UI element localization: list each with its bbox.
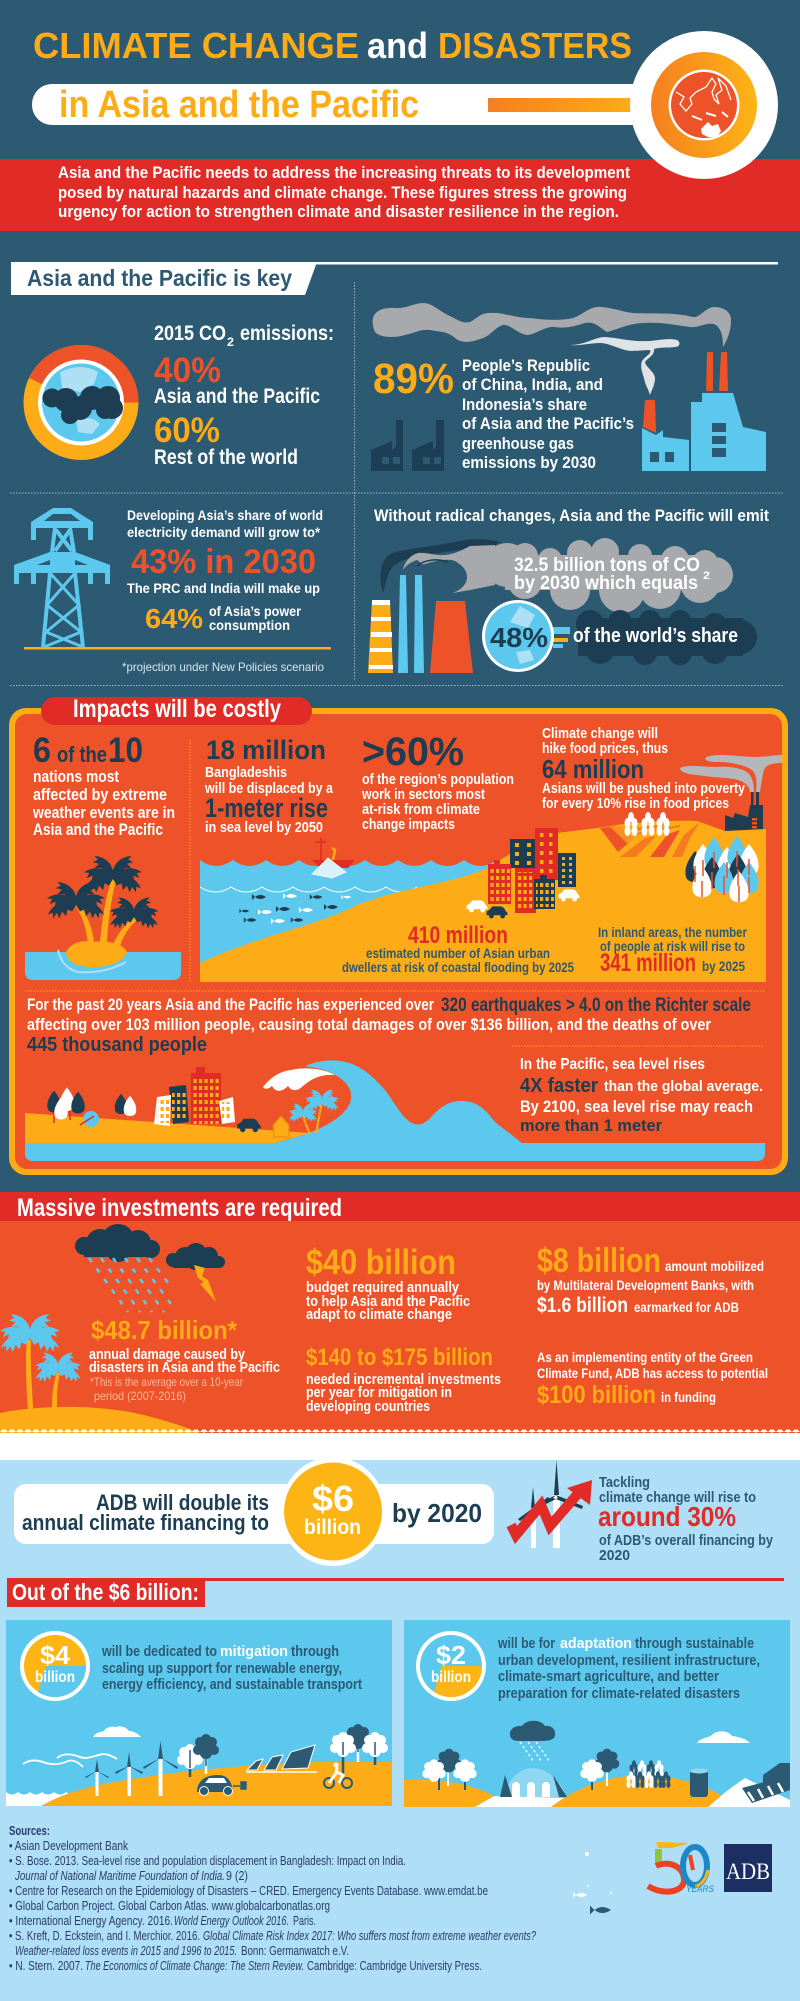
- circle: 4 billion: billion: [35, 1669, 75, 1686]
- stat: 64 million: Climate change will: [542, 725, 658, 742]
- stat: 341 million: In inland areas, the number: [598, 924, 747, 940]
- financing share text: around 30%: [598, 1501, 736, 1532]
- title line one: and: [367, 25, 428, 66]
- wheat: [624, 812, 670, 836]
- stat: 100 billion: $100 billion: [537, 1381, 656, 1409]
- sea and land scene: [200, 812, 766, 982]
- sources list: Weather-related loss events in 2015 and 1996 to 2015.: [15, 1944, 237, 1958]
- stat: 341 million: [598, 924, 747, 977]
- heading: without radical changes: Without radical changes, Asia and the Pacific will emit: [374, 507, 769, 525]
- adaptation scene: [404, 1721, 790, 1807]
- sources list: • Asian Development Bank: [9, 1839, 129, 1853]
- white cloud: [697, 1731, 750, 1743]
- sources list: [9, 1824, 536, 1973]
- stat: 48.7 billion: [89, 1315, 280, 1403]
- demand text: 43% in 2030: [131, 543, 316, 581]
- share text: Indonesia’s share: [462, 396, 587, 414]
- panel: mitigation: [6, 1620, 392, 1806]
- financing text: ADB will double its: [96, 1490, 269, 1515]
- red intro band: Asia and the Pacific needs to address the increasing threats to its development: [58, 163, 630, 182]
- stat: 48.7 billion: period (2007-2016): [94, 1389, 186, 1403]
- trees: [685, 836, 759, 902]
- adaptation text: through sustainable: [635, 1635, 754, 1652]
- stat: 18 million: [204, 735, 334, 836]
- stat: 8 billion: by Multilateral Development Banks, with: [537, 1277, 754, 1293]
- circle: 4 billion: $4: [40, 1640, 71, 1670]
- emission text: by 2030 which equals: [514, 573, 698, 594]
- ADB box: ADB: [726, 1859, 770, 1884]
- stat: 6 of the 10: affected by extreme: [33, 785, 167, 804]
- sources list: Journal of National Maritime Foundation of India.: [14, 1869, 225, 1883]
- heading: Out of the 6 billion: [7, 1578, 784, 1607]
- stat: 64 million: Asians will be pushed into poverty: [542, 780, 746, 797]
- palms: [288, 1088, 340, 1134]
- stat: more than 60 percent: work in sectors most: [361, 786, 485, 803]
- mitigation text: mitigation: [220, 1643, 288, 1660]
- ground line: [24, 647, 331, 650]
- stat: 48.7 billion: disasters in Asia and the Pacific: [89, 1359, 280, 1376]
- factory and smoke: [680, 755, 782, 831]
- stat: 6 of the 10: of the: [57, 742, 107, 767]
- share text: emissions by 2030: [462, 454, 596, 472]
- stat: more than 60 percent: >60%: [362, 730, 464, 774]
- sources list: Bonn: Germanwatch e.V.: [241, 1944, 349, 1958]
- financing share text: 2020: [599, 1547, 630, 1564]
- page background: [0, 0, 800, 1460]
- damaged buildings: [154, 1067, 235, 1126]
- foam: [263, 1068, 335, 1091]
- tsunami scene: [25, 1060, 765, 1161]
- stat: 64 million: hike food prices, thus: [542, 740, 668, 757]
- stat: 40 percent: Asia and the Pacific: [154, 385, 320, 408]
- water tank: [690, 1768, 708, 1797]
- icon: storm cloud and lightning: [166, 1243, 225, 1302]
- water and hill: [6, 1792, 78, 1806]
- stat: 89 percent: 89%: [373, 355, 454, 403]
- adaptation text: urban development, resilient infrastructure,: [498, 1652, 760, 1669]
- title pill with subtitle: in Asia and the Pacific: [59, 84, 419, 126]
- panel: Massive investments are required: [0, 1192, 800, 1433]
- stat: 410 million: 410 million: [408, 922, 508, 949]
- sea level text: more than 1 meter: [520, 1116, 662, 1135]
- car and hut: [237, 1116, 289, 1137]
- sources list: Global Climate Risk Index 2017: Who suffers most from extreme weather events?: [203, 1929, 536, 1943]
- stat: 100 billion: in funding: [661, 1389, 716, 1405]
- globe: 48 percent: 48%: [490, 622, 548, 653]
- earthquake text: 445 thousand people: [27, 1034, 207, 1056]
- stat: 140 to 175 billion: per year for mitigation in: [306, 1384, 452, 1401]
- circle: 6 billion: billion: [304, 1516, 361, 1539]
- earthquake text: [27, 995, 751, 1056]
- mitigation text: through: [291, 1643, 339, 1660]
- city buildings: [467, 828, 579, 918]
- adaptation text: preparation for climate-related disasters: [498, 1685, 740, 1702]
- panel: electricity demand: [14, 507, 331, 674]
- share text: [462, 357, 634, 472]
- wave: [25, 1060, 765, 1161]
- stat: 341 million: of people at risk will rise to: [600, 938, 745, 954]
- financing text: by 2020: [392, 1498, 482, 1528]
- adaptation text: adaptation: [560, 1635, 632, 1652]
- stat: 18 million: will be displaced by a: [204, 780, 334, 797]
- sources list: • Centre for Research on the Epidemiology of Disasters – CRED. Emergency Events Database. www.emdat.be: [9, 1884, 488, 1898]
- stat: more than 60 percent: change impacts: [362, 816, 455, 833]
- stat: 64 million: [542, 725, 746, 812]
- trees shaken: [47, 1088, 136, 1127]
- land: [200, 821, 766, 982]
- mitigation text: [101, 1643, 362, 1693]
- stat: 40 billion: budget required annually: [306, 1279, 460, 1296]
- stat: 64 million: 64 million: [542, 754, 644, 784]
- panel: 2015 CO2 emissions: [24, 322, 334, 469]
- section heading: Asia and the Pacific is key: [11, 262, 778, 295]
- white strip with zigzag edge: [0, 1430, 800, 1460]
- stat: 48.7 billion: $48.7 billion*: [91, 1315, 238, 1345]
- stat: 140 to 175 billion: [306, 1344, 501, 1415]
- mitigation text: energy efficiency, and sustainable transport: [102, 1676, 362, 1693]
- donut chart: emissions share: [24, 345, 138, 460]
- dark smoke: [380, 539, 500, 593]
- dark cloud label: [573, 610, 757, 665]
- stat: 18 million: Bangladeshis: [205, 764, 287, 781]
- emission text: 2: [703, 570, 710, 582]
- CO2 heading: 2015 CO: [154, 322, 226, 345]
- stat: 40 percent: [154, 351, 320, 408]
- circle: 6 billion: [280, 1457, 386, 1566]
- demand text: [122, 507, 324, 674]
- stat: 6 of the 10: Asia and the Pacific: [33, 820, 163, 839]
- cyclist: [324, 1762, 352, 1788]
- icon: globe in ring: [630, 31, 778, 179]
- wheat crops: [626, 1760, 671, 1788]
- raised house: [742, 1763, 790, 1803]
- light blue lower section: [0, 1460, 800, 2001]
- stat: more than 60 percent: at-risk from climate: [362, 801, 480, 818]
- stat: 60 percent: [154, 411, 298, 469]
- stat: 8 billion: amount mobilized: [665, 1258, 764, 1274]
- demand text: *projection under New Policies scenario: [122, 660, 324, 674]
- stat: 18 million: 18 million: [206, 735, 326, 765]
- stat: 18 million: 1-meter rise: [205, 793, 328, 823]
- stat: more than 60 percent: [361, 730, 514, 833]
- stat: 60 percent: 60%: [154, 411, 220, 450]
- stat: 410 million: estimated number of Asian urban: [366, 945, 550, 961]
- stat: 40 billion: [306, 1243, 470, 1323]
- demand text: electricity demand will grow to*: [127, 524, 320, 540]
- white pill: [14, 1484, 494, 1544]
- title line one: [33, 25, 632, 66]
- financing share text: climate change will rise to: [599, 1489, 756, 1506]
- circle: 2 billion: $2: [436, 1640, 466, 1670]
- heading pill: Impacts will be costly: [73, 695, 281, 723]
- icon: chimneys: [368, 575, 473, 673]
- sources list: Cambridge: Cambridge University Press.: [307, 1959, 482, 1973]
- stat: 100 billion: [537, 1349, 768, 1409]
- stat: 140 to 175 billion: needed incremental investments: [306, 1371, 501, 1388]
- sea level text: By 2100, sea level rise may reach: [520, 1097, 753, 1116]
- circle: 2 billion: [416, 1631, 486, 1701]
- stat: 341 million: 341 million: [600, 949, 696, 977]
- stat: 64 million: for every 10% rise in food prices: [542, 795, 729, 812]
- wind turbines: [85, 1741, 178, 1796]
- sea level text: than the global average.: [604, 1078, 763, 1095]
- sources list: • S. Bose. 2013. Sea-level rise and population displacement in Bangladesh: Impact on India.: [9, 1854, 406, 1868]
- solar panels: [246, 1745, 317, 1772]
- sea level text: 4X faster: [520, 1075, 598, 1097]
- stat: 60 percent: Rest of the world: [154, 446, 298, 469]
- trees: [177, 1724, 388, 1777]
- logo: ADB 50 years: [648, 1842, 772, 1894]
- stat: 8 billion: $1.6 billion: [537, 1294, 628, 1317]
- wind lines: [23, 1754, 117, 1767]
- dark cloud label: of the world’s share: [573, 625, 738, 647]
- share text: greenhouse gas: [462, 435, 574, 453]
- land: [25, 1113, 310, 1143]
- icon: blue factory: [642, 352, 766, 471]
- sources list: 9 (2): [226, 1869, 248, 1883]
- panel: adaptation: [404, 1620, 790, 1807]
- red intro band: [0, 159, 800, 231]
- water and hills: [471, 1796, 566, 1807]
- icon: palm island: [25, 853, 181, 980]
- circle: 6 billion: $6: [312, 1478, 354, 1519]
- sea level text: [520, 1056, 763, 1135]
- section heading: Asia and the Pacific is key: Asia and the Pacific is key: [27, 265, 292, 291]
- heading band: Massive investments are required: [17, 1194, 342, 1222]
- panel: 89 percent greenhouse gas: [371, 303, 766, 472]
- stat: 40 billion: adapt to climate change: [306, 1306, 452, 1323]
- icon: dark factories: [371, 420, 444, 471]
- share text: People’s Republic: [462, 357, 590, 375]
- icon: wind turbines and rising arrow: [511, 1460, 592, 1548]
- emission text: [514, 555, 710, 594]
- share text: of China, India, and: [462, 376, 603, 394]
- adaptation text: [497, 1635, 760, 1702]
- stat: 40 percent: 40%: [154, 351, 221, 390]
- panel: ADB doubling climate financing: [14, 1457, 774, 1566]
- mitigation text: scaling up support for renewable energy,: [102, 1660, 342, 1677]
- stat: 40 billion: to help Asia and the Pacific: [306, 1293, 470, 1310]
- fishing boat: [312, 838, 355, 878]
- sources list: Paris.: [293, 1914, 316, 1928]
- dam: [500, 1768, 567, 1797]
- share text: of Asia and the Pacific’s: [462, 415, 634, 433]
- stat: 6 of the 10: 6: [33, 731, 51, 770]
- smoke: [373, 303, 731, 395]
- sources list: World Energy Outlook 2016.: [174, 1914, 289, 1928]
- water: [200, 860, 497, 982]
- financing share text: [598, 1474, 774, 1564]
- title line one: CLIMATE CHANGE: [33, 25, 359, 66]
- sources list: Sources:: [9, 1824, 50, 1838]
- header: title block: [0, 25, 800, 231]
- stat: 40 billion: $40 billion: [306, 1243, 456, 1282]
- circle: 2 billion: billion: [431, 1669, 471, 1686]
- stat: 410 million: dwellers at risk of coastal flooding by 2025: [342, 959, 574, 975]
- demand text: The PRC and India will make up: [127, 580, 320, 596]
- sources list: • Global Carbon Project. Global Carbon Atlas. www.globalcarbonatlas.org: [9, 1899, 330, 1913]
- trees: [422, 1749, 619, 1790]
- stat: more than 60 percent: of the region’s population: [362, 771, 514, 788]
- mitigation text: will be dedicated to: [101, 1643, 217, 1660]
- panel: Impacts will be costly: [9, 695, 788, 1175]
- stat: 48.7 billion: annual damage caused by: [89, 1346, 246, 1363]
- stat: 8 billion: [537, 1242, 764, 1317]
- sources list: • International Energy Agency. 2016.: [9, 1914, 173, 1928]
- cloud: [93, 1726, 141, 1737]
- demand text: consumption: [209, 617, 290, 633]
- fish: [239, 893, 351, 924]
- decorative fish: [573, 1852, 612, 1914]
- title line one: DISASTERS: [438, 25, 632, 66]
- demand text: 64%: [145, 603, 203, 634]
- sources list: The Economics of Climate Change: The Stern Review.: [85, 1959, 304, 1973]
- stat: 8 billion: $8 billion: [537, 1242, 661, 1280]
- electric car: [197, 1775, 246, 1796]
- sources list: • N. Stern. 2007.: [9, 1959, 83, 1973]
- globe: 48 percent: [482, 600, 570, 672]
- sources list: • S. Kreft, D. Eckstein, and I. Merchior. 2016.: [9, 1929, 200, 1943]
- financing share text: Tackling: [599, 1474, 650, 1491]
- 50 years mark: YEARS: [686, 1884, 714, 1894]
- earthquake text: For the past 20 years Asia and the Pacific has experienced over: [27, 995, 434, 1014]
- gray emission cloud: [403, 538, 733, 613]
- financing text: [22, 1490, 482, 1535]
- emission text: 32.5 billion tons of CO: [514, 555, 700, 576]
- circle: 4 billion: [20, 1631, 90, 1701]
- panel: world share of emissions: [368, 507, 769, 673]
- title pill with subtitle: [32, 84, 672, 126]
- stat: 18 million: in sea level by 2050: [205, 819, 323, 836]
- CO2 heading: 2: [227, 335, 234, 349]
- icon: transmission tower: [14, 508, 110, 647]
- mitigation scene: [6, 1724, 392, 1806]
- adaptation text: will be for: [497, 1635, 555, 1652]
- farm field: [600, 822, 700, 857]
- stat: 48.7 billion: *This is the average over a 10-year: [90, 1375, 243, 1389]
- demand text: of Asia’s power: [209, 603, 301, 619]
- stat: 6 of the 10: weather events are in: [32, 803, 175, 822]
- stat: 100 billion: As an implementing entity of the Green: [537, 1349, 753, 1365]
- stat: 8 billion: earmarked for ADB: [634, 1299, 739, 1315]
- red intro band: urgency for action to strengthen climate and disaster resilience in the region.: [58, 202, 619, 221]
- stat: 6 of the 10: 10: [108, 731, 143, 770]
- stat: 140 to 175 billion: developing countries: [306, 1398, 430, 1415]
- stat: 6 of the 10: [32, 731, 175, 839]
- sea level text: In the Pacific, sea level rises: [520, 1056, 705, 1073]
- adaptation text: climate-smart agriculture, and better: [498, 1668, 719, 1685]
- demand text: Developing Asia’s share of world: [127, 507, 323, 523]
- icon: island with palms: [0, 1311, 200, 1433]
- icon: rain cloud: [75, 1224, 172, 1312]
- rain cloud: [510, 1721, 555, 1762]
- stat: 341 million: by 2025: [702, 958, 745, 974]
- CO2 heading: emissions:: [240, 322, 334, 345]
- financing text: annual climate financing to: [22, 1510, 269, 1535]
- stat: 410 million: [342, 922, 574, 975]
- stat: 6 of the 10: nations most: [33, 767, 119, 786]
- heading band: [0, 1192, 800, 1222]
- red intro band: posed by natural hazards and climate change. These figures stress the growing: [58, 183, 627, 202]
- stat: 140 to 175 billion: $140 to $175 billion: [306, 1344, 493, 1371]
- heading: Out of the 6 billion: Out of the $6 billion:: [12, 1579, 199, 1605]
- CO2 heading: [154, 322, 334, 349]
